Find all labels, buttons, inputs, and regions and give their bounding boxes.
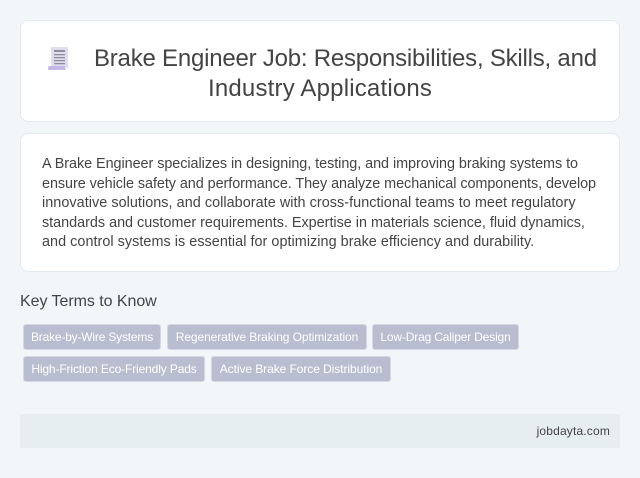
tag: Regenerative Braking Optimization — [167, 324, 367, 350]
tag: Active Brake Force Distribution: Active Brake Force Distribution — [220, 362, 382, 376]
description text: A Brake Engineer specializes in designing, testing, and improving braking systems to — [42, 156, 578, 172]
tag: High-Friction Eco-Friendly Pads: High-Friction Eco-Friendly Pads — [31, 362, 197, 376]
footer bar — [20, 414, 620, 448]
description text: standards and customer requirements. Expertise in materials science, fluid dynamics, — [42, 215, 585, 231]
description text — [42, 156, 596, 250]
tag: Brake-by-Wire Systems — [23, 324, 161, 350]
title: Brake Engineer Job: Responsibilities, Skills, and — [94, 45, 597, 72]
tag: Low-Drag Caliper Design — [372, 324, 519, 350]
tag: High-Friction Eco-Friendly Pads — [23, 356, 205, 382]
footer site name: jobdayta.com — [537, 424, 610, 438]
description text: innovative solutions, and collaborate with cross-functional teams to meet regulatory — [42, 195, 576, 211]
term tags — [23, 324, 519, 382]
title — [94, 45, 597, 102]
icon: document scroll — [48, 47, 68, 70]
title: Industry Applications — [208, 75, 432, 102]
header panel — [20, 20, 620, 122]
tag: Active Brake Force Distribution — [211, 356, 391, 382]
tag: Brake-by-Wire Systems: Brake-by-Wire Systems — [31, 330, 153, 344]
tag: Regenerative Braking Optimization: Regenerative Braking Optimization — [176, 330, 358, 344]
key terms heading: Key Terms to Know — [20, 293, 157, 310]
description text: and control systems is essential for optimizing brake efficiency and durability. — [42, 234, 534, 250]
description panel — [20, 133, 620, 272]
tag: Low-Drag Caliper Design: Low-Drag Caliper Design — [380, 330, 511, 344]
description text: ensure vehicle safety and performance. They analyze mechanical components, develop — [42, 176, 596, 192]
